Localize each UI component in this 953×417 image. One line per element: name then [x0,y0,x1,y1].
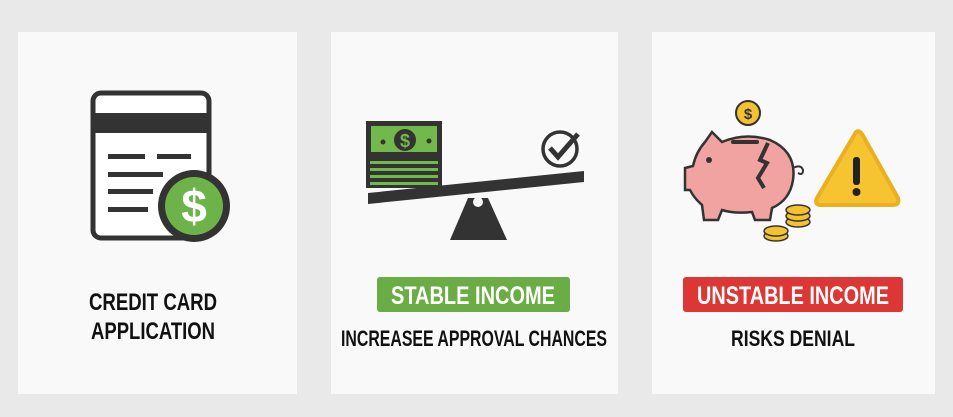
heading: credit card application: CREDIT CARD [89,289,217,316]
icon: coin: $ [744,106,753,123]
icon: dollar coin [158,170,230,242]
label: unstable income [683,277,903,312]
icon: seesaw [368,171,584,240]
icon: dollar coin: $ [181,180,207,232]
icon: check mark [543,132,578,166]
heading: credit card application: APPLICATION [91,318,215,345]
label: stable income [377,277,570,312]
heading: credit card application [89,289,217,345]
text: risks denial: RISKS DENIAL [731,326,855,351]
icon: coin stacks [764,205,810,241]
icon: application document [93,93,209,238]
label: unstable income: UNSTABLE INCOME [697,282,889,310]
label: stable income: STABLE INCOME [391,282,555,310]
icon: cash stack: $ [400,131,410,151]
icon: broken piggy bank [685,132,803,220]
icon: warning triangle [816,131,898,205]
panel: stable income [331,32,618,394]
panel: unstable income [652,32,935,394]
icon: cash stack [366,121,442,188]
icon: coin [736,101,760,125]
text: increasee approval chances: INCREASEE APPROVAL CHANCES [341,326,607,351]
panel: credit card application [18,32,297,394]
